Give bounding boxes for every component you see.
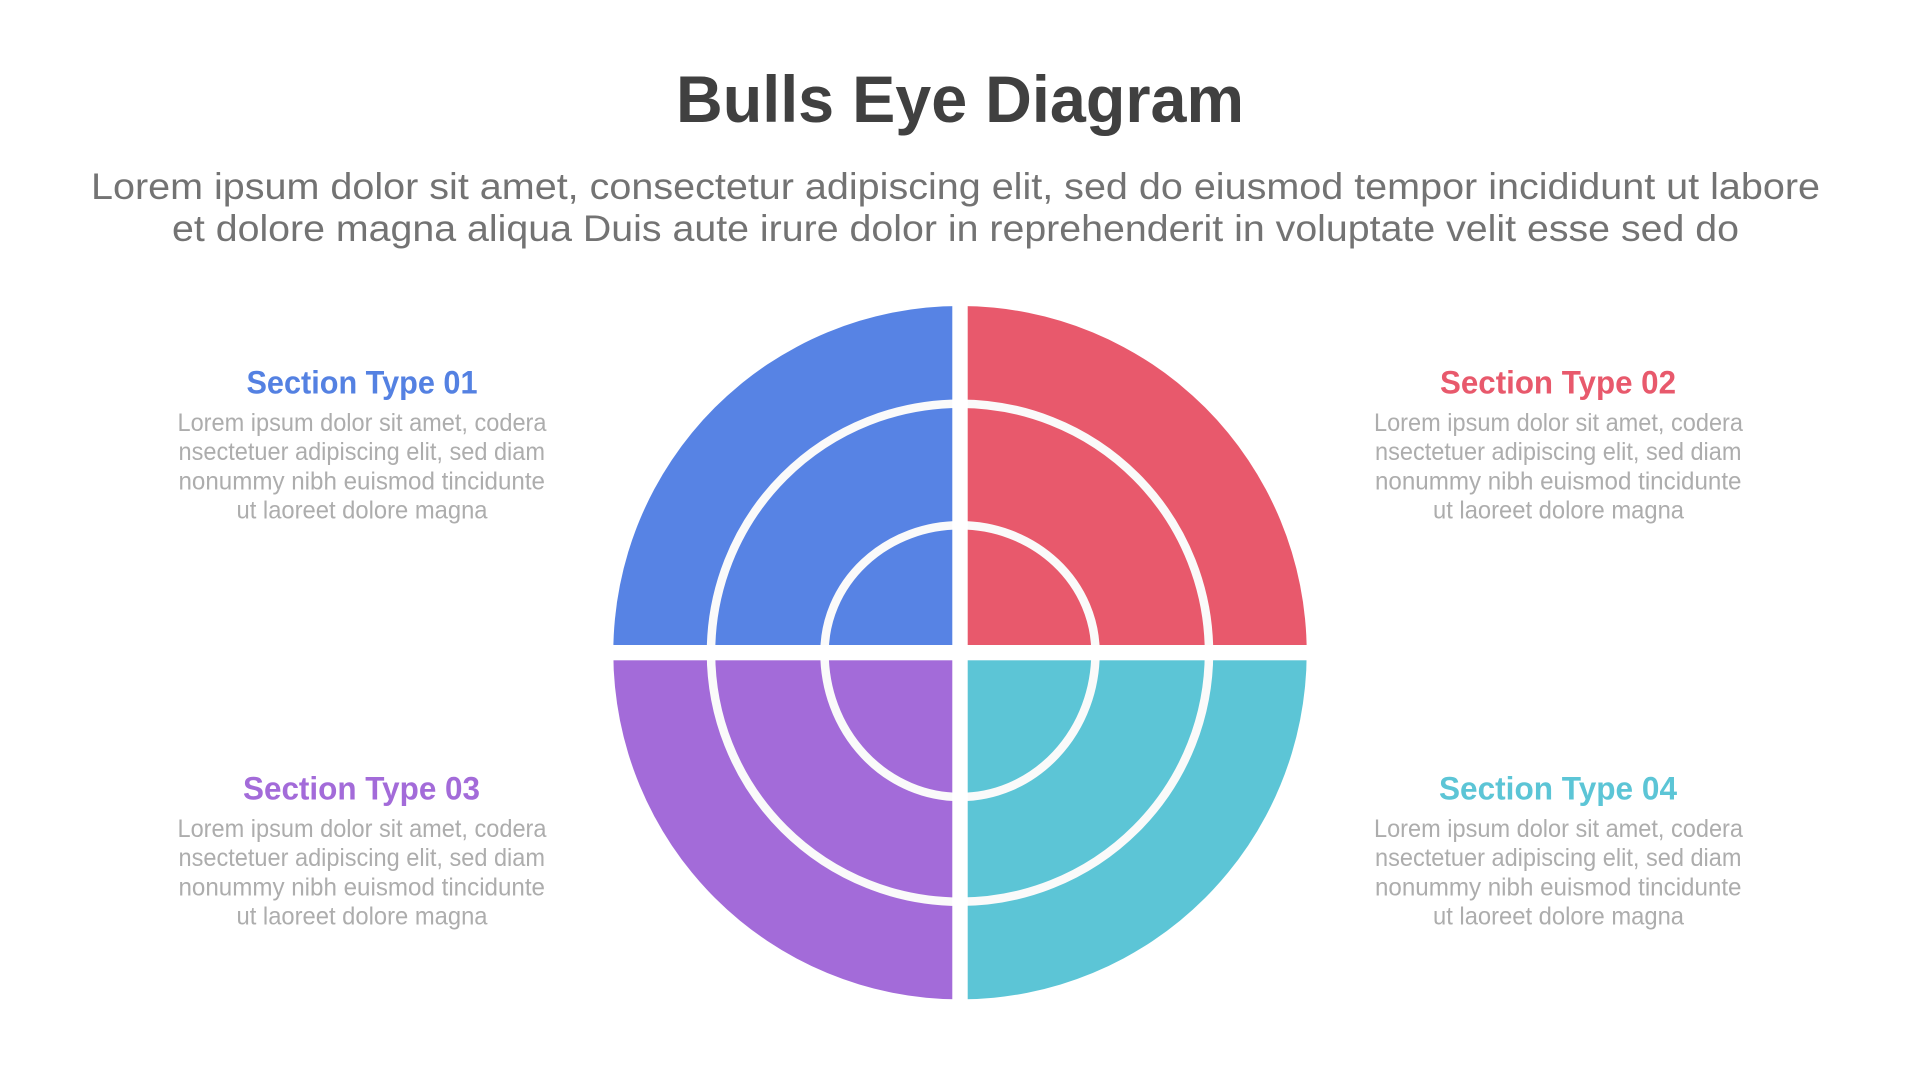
body: section 03: Lorem ipsum dolor sit amet, codera (178, 815, 547, 843)
section 02 (1374, 364, 1743, 524)
body: section 02: nonummy nibh euismod tincidunte (1375, 468, 1742, 496)
heading: section 01: Section Type 01 (246, 364, 478, 400)
horizontal gap (600, 645, 1320, 660)
body: section 02: nsectetuer adipiscing elit, sed diam (1375, 438, 1742, 466)
body: section 03: nsectetuer adipiscing elit, sed diam (178, 844, 545, 872)
outer ring divider (711, 404, 1209, 902)
section 04 (1374, 770, 1743, 930)
body: section 03 (178, 815, 547, 930)
quadrant: blue (613, 306, 960, 653)
heading: section 03: Section Type 03 (243, 770, 480, 806)
quadrant: purple (613, 653, 960, 999)
subtitle text: Lorem ipsum dolor sit amet, consectetur adipiscing elit, sed do eiusmod tempor incididunt ut labore (91, 166, 1820, 207)
body: section 04: Lorem ipsum dolor sit amet, codera (1374, 815, 1743, 843)
body: section 03: nonummy nibh euismod tincidunte (178, 874, 545, 902)
body: section 04 (1374, 815, 1743, 930)
body: section 04: nsectetuer adipiscing elit, sed diam (1375, 844, 1742, 872)
inner ring divider (824, 525, 1096, 797)
body: section 02: Lorem ipsum dolor sit amet, codera (1374, 409, 1743, 437)
body: section 02 (1374, 409, 1743, 524)
body: section 04: ut laoreet dolore magna (1433, 902, 1684, 930)
section 03 (178, 770, 547, 930)
vertical gap (952, 290, 968, 1010)
body: section 01: ut laoreet dolore magna (236, 496, 488, 524)
body: section 01 (178, 409, 547, 524)
quadrant: teal (960, 653, 1307, 999)
body: section 01: nsectetuer adipiscing elit, sed diam (178, 438, 545, 466)
title: Bulls Eye Diagram (676, 62, 1244, 136)
bulls eye diagram (600, 290, 1320, 1010)
body: section 04: nonummy nibh euismod tincidunte (1375, 874, 1742, 902)
body: section 01: nonummy nibh euismod tincidunte (178, 468, 545, 496)
quadrant: red (960, 306, 1307, 653)
section 01 (178, 364, 547, 524)
body: section 03: ut laoreet dolore magna (236, 902, 488, 930)
subtitle text (91, 166, 1820, 249)
body: section 01: Lorem ipsum dolor sit amet, codera (178, 409, 547, 437)
body: section 02: ut laoreet dolore magna (1433, 496, 1684, 524)
heading: section 02: Section Type 02 (1440, 364, 1676, 400)
subtitle text: et dolore magna aliqua Duis aute irure dolor in reprehenderit in voluptate velit esse sed do (172, 208, 1739, 249)
heading: section 04: Section Type 04 (1439, 770, 1677, 806)
